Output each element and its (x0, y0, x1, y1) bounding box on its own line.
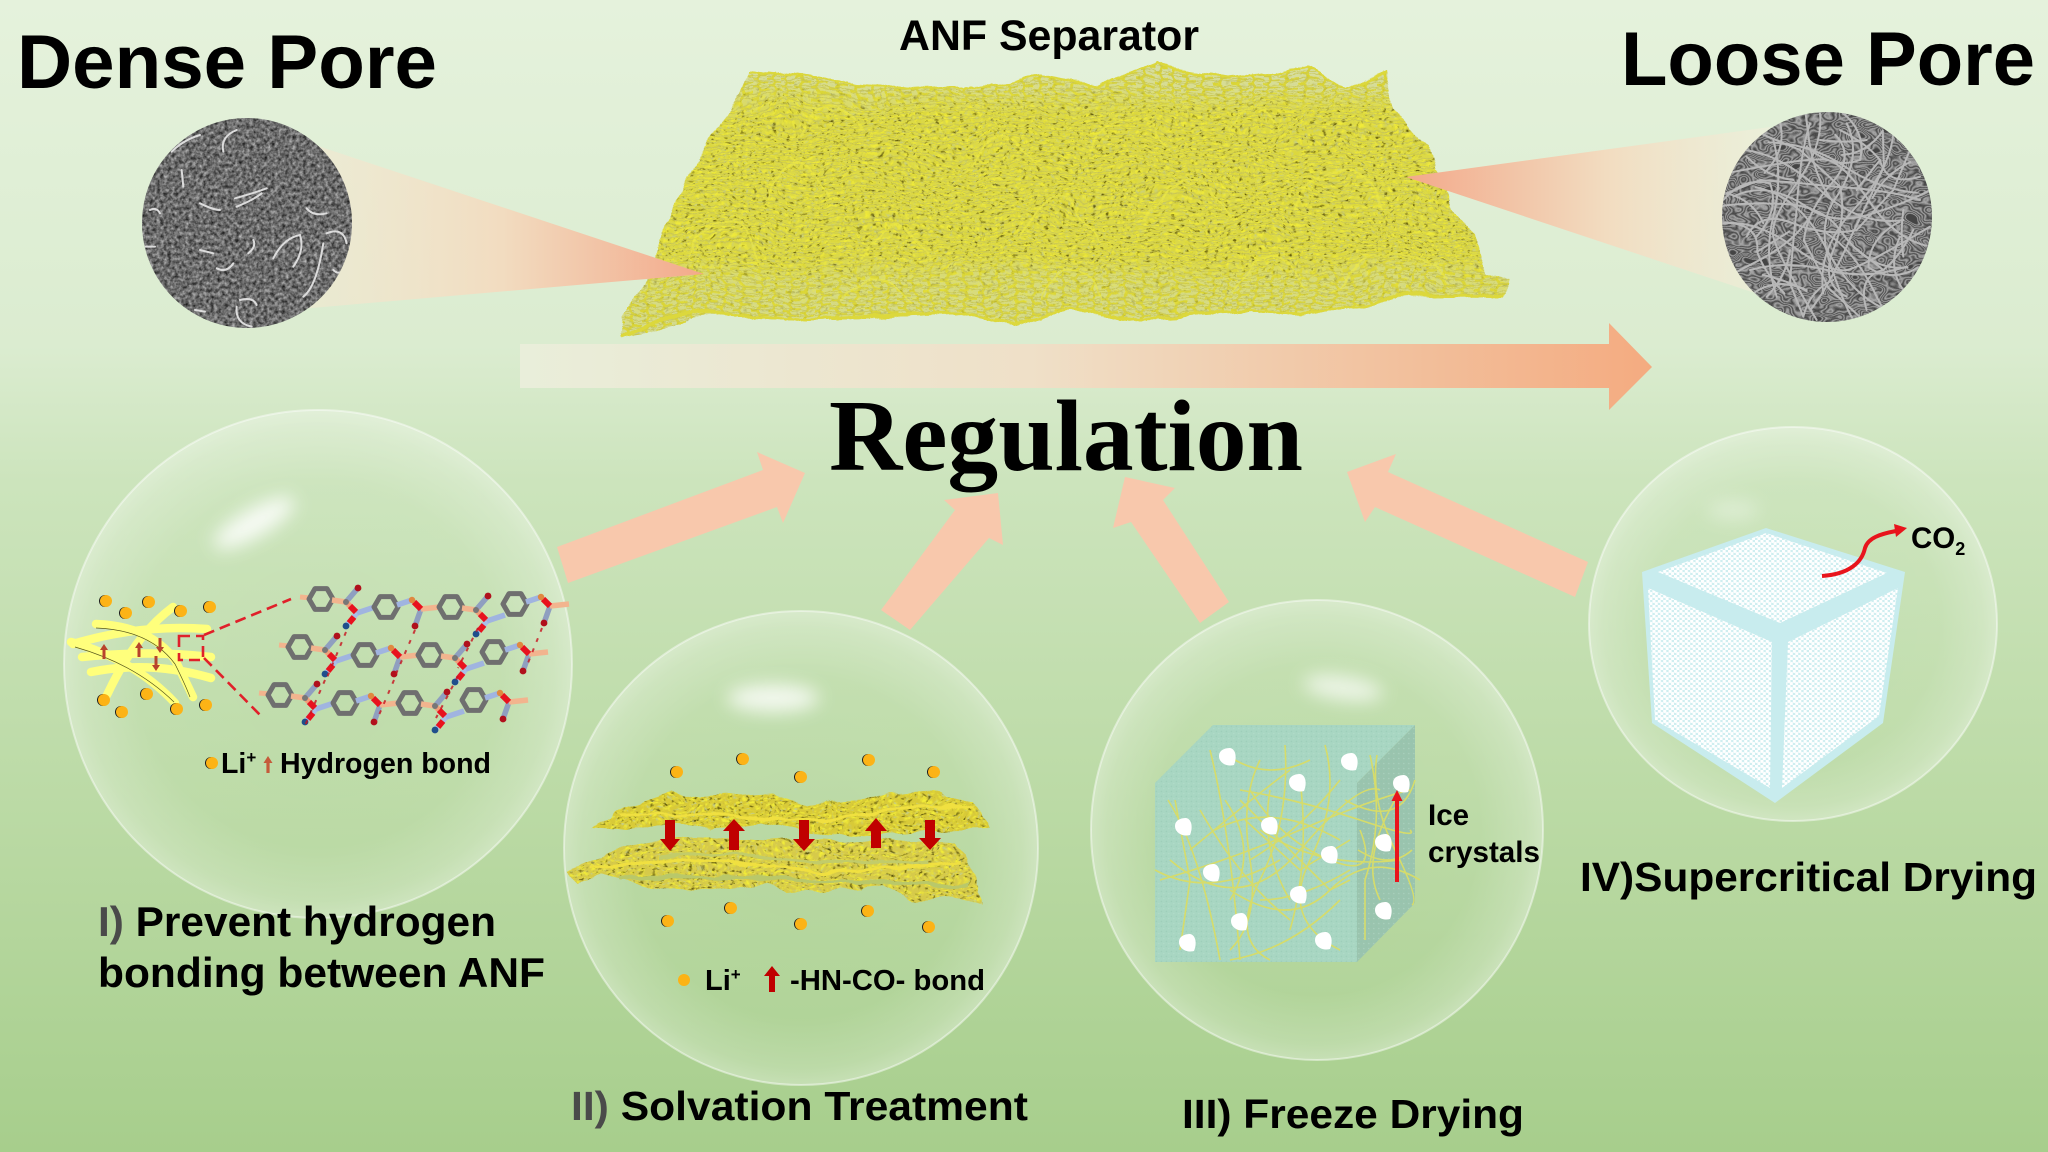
caption III: freeze drying: III) Freeze Drying (1182, 1091, 1524, 1137)
porous aerogel cube (1642, 528, 1905, 803)
arrow: method IV to regulation (1347, 454, 1588, 597)
label: CO2: 2 (1955, 539, 1965, 559)
legend: Li+ and hydrogen bond: + (246, 748, 256, 767)
red growth arrow (1392, 790, 1402, 882)
label: Ice crystals (1428, 799, 1540, 869)
bubble shell (564, 611, 1038, 1085)
ANF separator mesh sheet (610, 50, 1520, 345)
arrow: method I to regulation (557, 452, 805, 583)
zoom box and dashed leader lines (179, 599, 291, 717)
regulation direction arrow (520, 323, 1652, 410)
caption II: solvation treatment: II) Solvation Treatment (571, 1083, 1028, 1129)
bubble II: solvation treatment (564, 611, 1038, 1085)
arrow: method III to regulation (1113, 477, 1229, 623)
legend: Li+ and hydrogen bond: Li (221, 748, 246, 780)
bubble highlight (207, 488, 301, 558)
zoom cone: loose side (1406, 127, 1770, 298)
heading: ANF Separator: ANF Separator (899, 13, 1199, 60)
CO2 release arrow (1822, 524, 1907, 576)
legend: Li+ and hydrogen bond: Hydrogen bond (280, 748, 491, 780)
caption I: prevent hydrogen bonding: bonding between ANF (98, 949, 545, 996)
bubble highlight (1302, 671, 1384, 705)
legend: Li+ and -HN-CO- bond: Li (705, 965, 731, 997)
bubble I: prevent hydrogen bonding (64, 410, 572, 918)
heading: Regulation: Regulation (829, 380, 1303, 492)
repulsion arrows (660, 818, 941, 851)
zoom cone: dense side (300, 140, 704, 309)
aramid fibres with Li ions (71, 595, 216, 718)
caption IV: supercritical drying: IV)Supercritical Drying (1580, 854, 2037, 900)
SEM image: loose pore (1722, 112, 1932, 322)
lithium ions (661, 753, 940, 933)
frozen gel cube (1155, 725, 1420, 962)
label: Ice crystals: crystals (1428, 836, 1540, 869)
label: CO2: CO (1911, 522, 1955, 555)
ANF fibres inside cube (1155, 745, 1420, 960)
legend: Li+ and -HN-CO- bond (678, 965, 985, 997)
bubble highlight (1707, 500, 1759, 520)
bubble highlight (727, 684, 819, 712)
swollen ANF sheet, lower (567, 837, 982, 905)
bubble IV: supercritical drying (1589, 427, 1997, 821)
caption I: prevent hydrogen bonding: I) Prevent hydrogen (98, 898, 496, 945)
bubble shell (1091, 600, 1543, 1060)
swollen ANF sheet, upper (592, 792, 990, 837)
ice crystals (1175, 748, 1410, 952)
bubble III: freeze drying (1091, 600, 1543, 1060)
title: Loose Pore: Loose Pore (1621, 17, 2035, 102)
label: Ice crystals: Ice (1428, 799, 1469, 832)
caption I: prevent hydrogen bonding (98, 898, 545, 996)
legend: Li+ and -HN-CO- bond: + (731, 965, 741, 984)
polymer chains molecular structure (259, 585, 569, 733)
legend: Li+ and -HN-CO- bond: -HN-CO- bond (790, 965, 985, 997)
arrow: method II to regulation (881, 493, 1003, 630)
title: Dense Pore: Dense Pore (17, 20, 437, 105)
SEM image: dense pore (142, 118, 352, 328)
bubble shell (1589, 427, 1997, 821)
bubble shell (64, 410, 572, 918)
